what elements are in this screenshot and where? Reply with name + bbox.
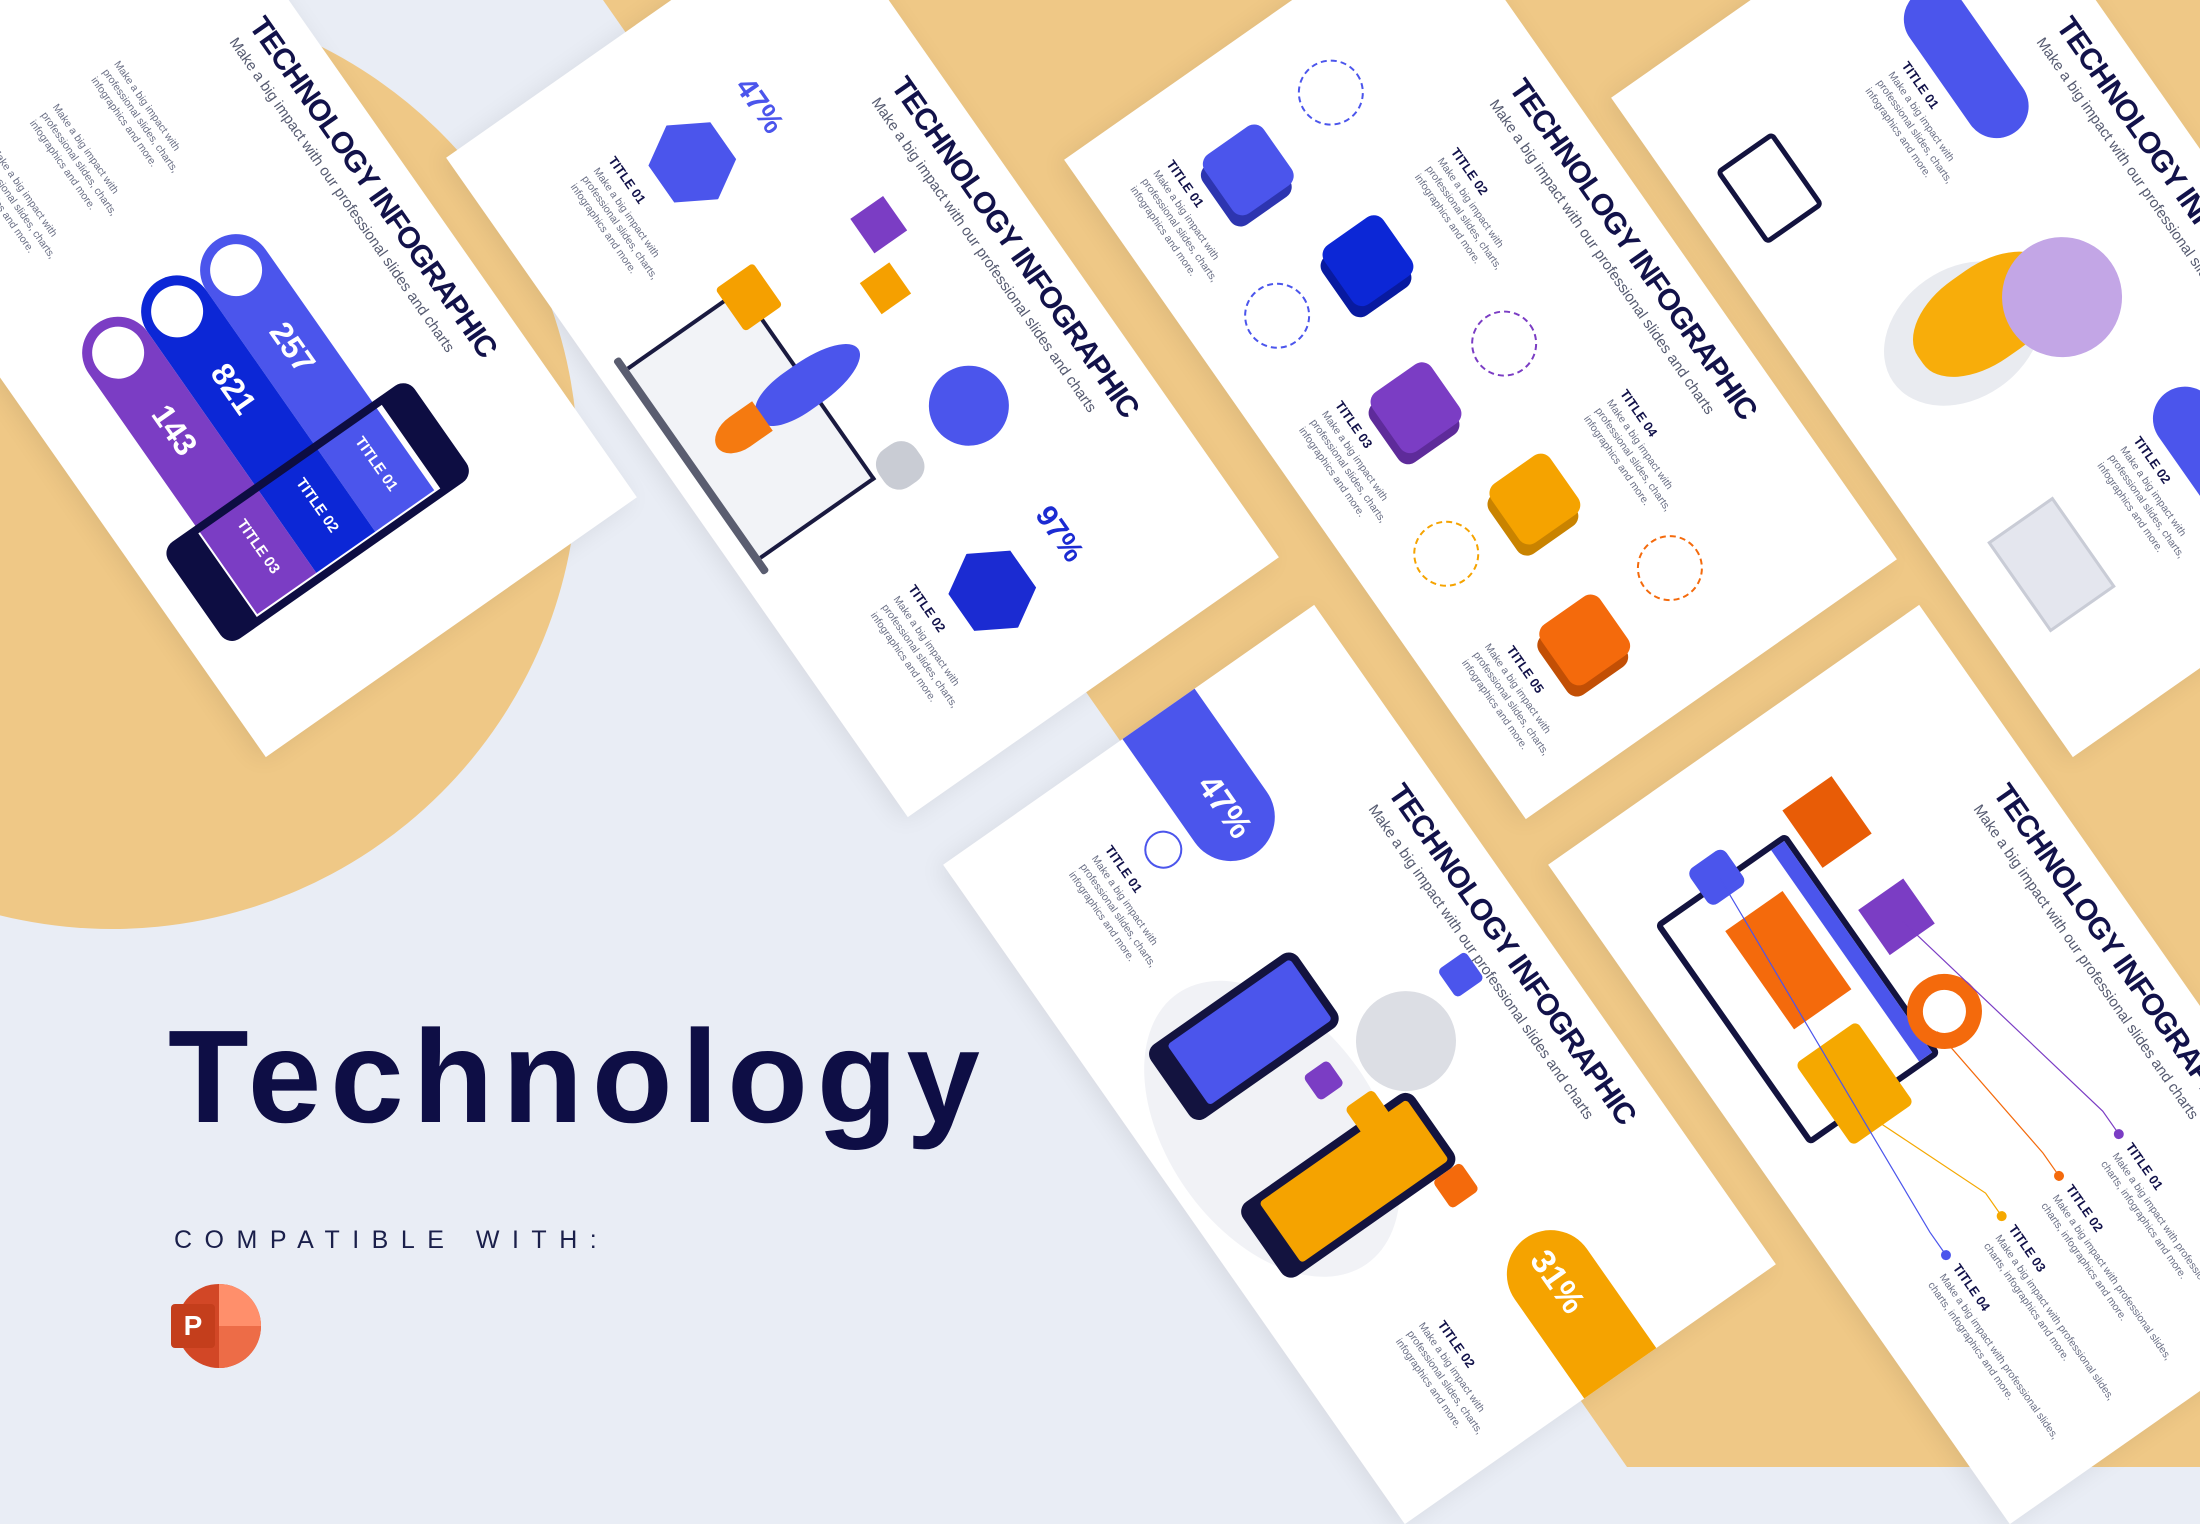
slide 4: globe: TITLE 02 bbox=[2131, 433, 2174, 486]
pill A bbox=[1891, 0, 2041, 151]
subtitle: Make a big impact with our professional slides and charts bbox=[1365, 801, 1597, 1123]
spotlight bbox=[1856, 232, 2070, 436]
people card bbox=[1795, 1021, 1914, 1146]
bar 257 bbox=[186, 220, 434, 532]
rocket bbox=[747, 330, 871, 437]
slide 4: globe: Make a big impact with professional slides, charts, infographics and more. bbox=[1863, 70, 1957, 186]
icon: powerpoint bbox=[171, 1284, 261, 1368]
dashed icon circles bbox=[1285, 47, 1377, 139]
slide 3: cubes: Make a big impact with professional slides, charts, infographics and more. bbox=[1412, 156, 1506, 272]
globe bbox=[913, 350, 1025, 461]
subtitle: Make a big impact with our professional slides and charts bbox=[868, 94, 1100, 416]
title: TECHNOLOGY INFOGRAPHIC bbox=[243, 11, 503, 364]
title 01: TITLE 01 bbox=[1899, 59, 1942, 112]
slide 3: cubes: Make a big impact with professional slides, charts, infographics and more. bbox=[1581, 397, 1675, 514]
shadow bbox=[1091, 933, 1453, 1324]
laptop illustration bbox=[627, 287, 876, 559]
phone frame: TITLE 03 bbox=[233, 516, 283, 577]
phone frame: TITLE 02 bbox=[292, 475, 342, 536]
slide 4: globe: Make a big impact with professional slides, charts, infographics and more. bbox=[2094, 444, 2189, 561]
title 02 text: TITLE 02 bbox=[1435, 1318, 1478, 1371]
hand pointer bbox=[869, 434, 932, 497]
slide 6: laptop with gears: Make a big impact with professional slides, charts, infographics and more. bbox=[2038, 1193, 2174, 1362]
pill right bbox=[2140, 374, 2200, 575]
globe gray bbox=[1336, 971, 1476, 1111]
pill 31% bbox=[1490, 1213, 1676, 1427]
stat 97%: TITLE 02 bbox=[905, 582, 949, 635]
phone orange bbox=[1236, 1088, 1460, 1282]
pill 47%: 47% bbox=[1190, 768, 1260, 845]
icon: powerpoint: P bbox=[184, 1310, 202, 1341]
slide 3: cubes: TITLE 02 bbox=[1448, 145, 1491, 198]
small iso icons bbox=[1437, 951, 1484, 998]
play icon bbox=[1686, 847, 1747, 908]
bar 143 bbox=[68, 303, 316, 614]
slide 3: cubes: TITLE 05 bbox=[1504, 643, 1547, 696]
cube 5 bbox=[1535, 590, 1635, 690]
padlock bbox=[715, 263, 783, 332]
book bbox=[1858, 879, 1935, 955]
slide 1: bars and phone bbox=[0, 0, 637, 757]
main heading: Technology bbox=[168, 1003, 989, 1150]
cube 4 bbox=[1485, 449, 1585, 549]
phone frame: TITLE 01 bbox=[351, 434, 401, 495]
stat 97%: 97% bbox=[1029, 500, 1090, 568]
laptop bbox=[1655, 833, 1941, 1146]
bar 821: 821 bbox=[204, 356, 264, 421]
slide 3: cubes: Make a big impact with professional slides, charts, infographics and more. bbox=[1128, 168, 1222, 284]
flame bbox=[707, 401, 773, 462]
slide 6: laptop with gears: Make a big impact with professional slides, charts, infographics and more. bbox=[1981, 1233, 2116, 1403]
connector lines bbox=[1729, 894, 2124, 1260]
stat 47%: TITLE 01 bbox=[605, 154, 649, 206]
title: TECHNOLOGY INFOGRAPHIC bbox=[885, 71, 1145, 424]
stat 47%: 47% bbox=[729, 72, 790, 140]
stat 47% bbox=[568, 72, 790, 282]
stat 97%: Make a big impact with professional slides, charts, infographics and more. bbox=[868, 594, 962, 710]
tablet bbox=[1715, 131, 1824, 245]
slide 1: bars and phone: Make a big impact with professional slides, charts, infographics and more. bbox=[27, 102, 121, 218]
book icons bbox=[850, 196, 907, 253]
titles list: TITLE 01 bbox=[2123, 1140, 2166, 1193]
text blocks: Make a big impact with professional slides, charts, infographics and more. bbox=[88, 59, 182, 175]
slide 6: laptop with gears: Make a big impact with professional slides, charts, infographics and more. bbox=[1925, 1272, 2061, 1442]
laptop base bbox=[613, 356, 770, 575]
cube 1 bbox=[1198, 120, 1298, 220]
bar 821 bbox=[127, 261, 375, 573]
slide 5: phones bbox=[943, 605, 1776, 1524]
bar 143: 143 bbox=[145, 398, 205, 462]
cube 3 bbox=[1366, 358, 1466, 458]
pill 31%: 31% bbox=[1522, 1243, 1593, 1321]
title: TECHNOLOGY INFOGRAPHIC bbox=[1503, 73, 1763, 426]
slide 3: cubes: TITLE 03 bbox=[1332, 398, 1376, 451]
bar 257: 257 bbox=[263, 315, 323, 380]
title 01 text: TITLE 01 bbox=[1102, 842, 1145, 895]
slide 6: laptop with gears: TITLE 02 bbox=[2063, 1182, 2106, 1235]
phone blue bbox=[1144, 948, 1343, 1125]
slide 6: laptop with gears bbox=[1548, 605, 2200, 1524]
globe bbox=[1978, 214, 2146, 381]
title: TECHNOLOGY INFOGRAPHIC bbox=[1382, 778, 1642, 1131]
cube 2 bbox=[1318, 211, 1418, 311]
slide 5: phones: Make a big impact with professional slides, charts, infographics and more. bbox=[1066, 853, 1160, 970]
slide 3: cubes: Make a big impact with professional slides, charts, infographics and more. bbox=[1296, 409, 1390, 525]
gears bbox=[1892, 959, 1997, 1064]
slide 3: cubes: Make a big impact with professional slides, charts, infographics and more. bbox=[1459, 642, 1553, 758]
slide 3: cubes: TITLE 04 bbox=[1617, 386, 1660, 439]
pill 47% bbox=[1100, 656, 1292, 878]
subtitle: Make a big impact with our professional slides and charts bbox=[226, 34, 458, 356]
phone frame bbox=[161, 378, 474, 646]
laptop bbox=[1987, 497, 2116, 633]
subtitle: Make a big impact with our professional slides and charts bbox=[1970, 801, 2200, 1123]
texts: TITLE 01 bbox=[1164, 157, 1207, 210]
slide 3: cubes bbox=[1064, 0, 1897, 819]
slide 5: phones: Make a big impact with professional slides, charts, infographics and more. bbox=[1393, 1320, 1487, 1437]
slide 6: laptop with gears: TITLE 03 bbox=[2006, 1222, 2049, 1275]
stat 47%: Make a big impact with professional slides, charts, infographics and more. bbox=[568, 166, 662, 282]
subtitle: Make a big impact with our professional slides and charts bbox=[1486, 96, 1718, 418]
compatible with label: COMPATIBLE WITH: bbox=[174, 1226, 609, 1254]
envelope bbox=[1782, 776, 1872, 868]
stat 97% bbox=[868, 500, 1090, 710]
slide 6: laptop with gears: TITLE 04 bbox=[1950, 1261, 1993, 1314]
globe icon bbox=[1137, 823, 1190, 876]
slide 4: globe bbox=[1611, 0, 2200, 757]
slide 2: rocket laptop bbox=[446, 0, 1279, 817]
